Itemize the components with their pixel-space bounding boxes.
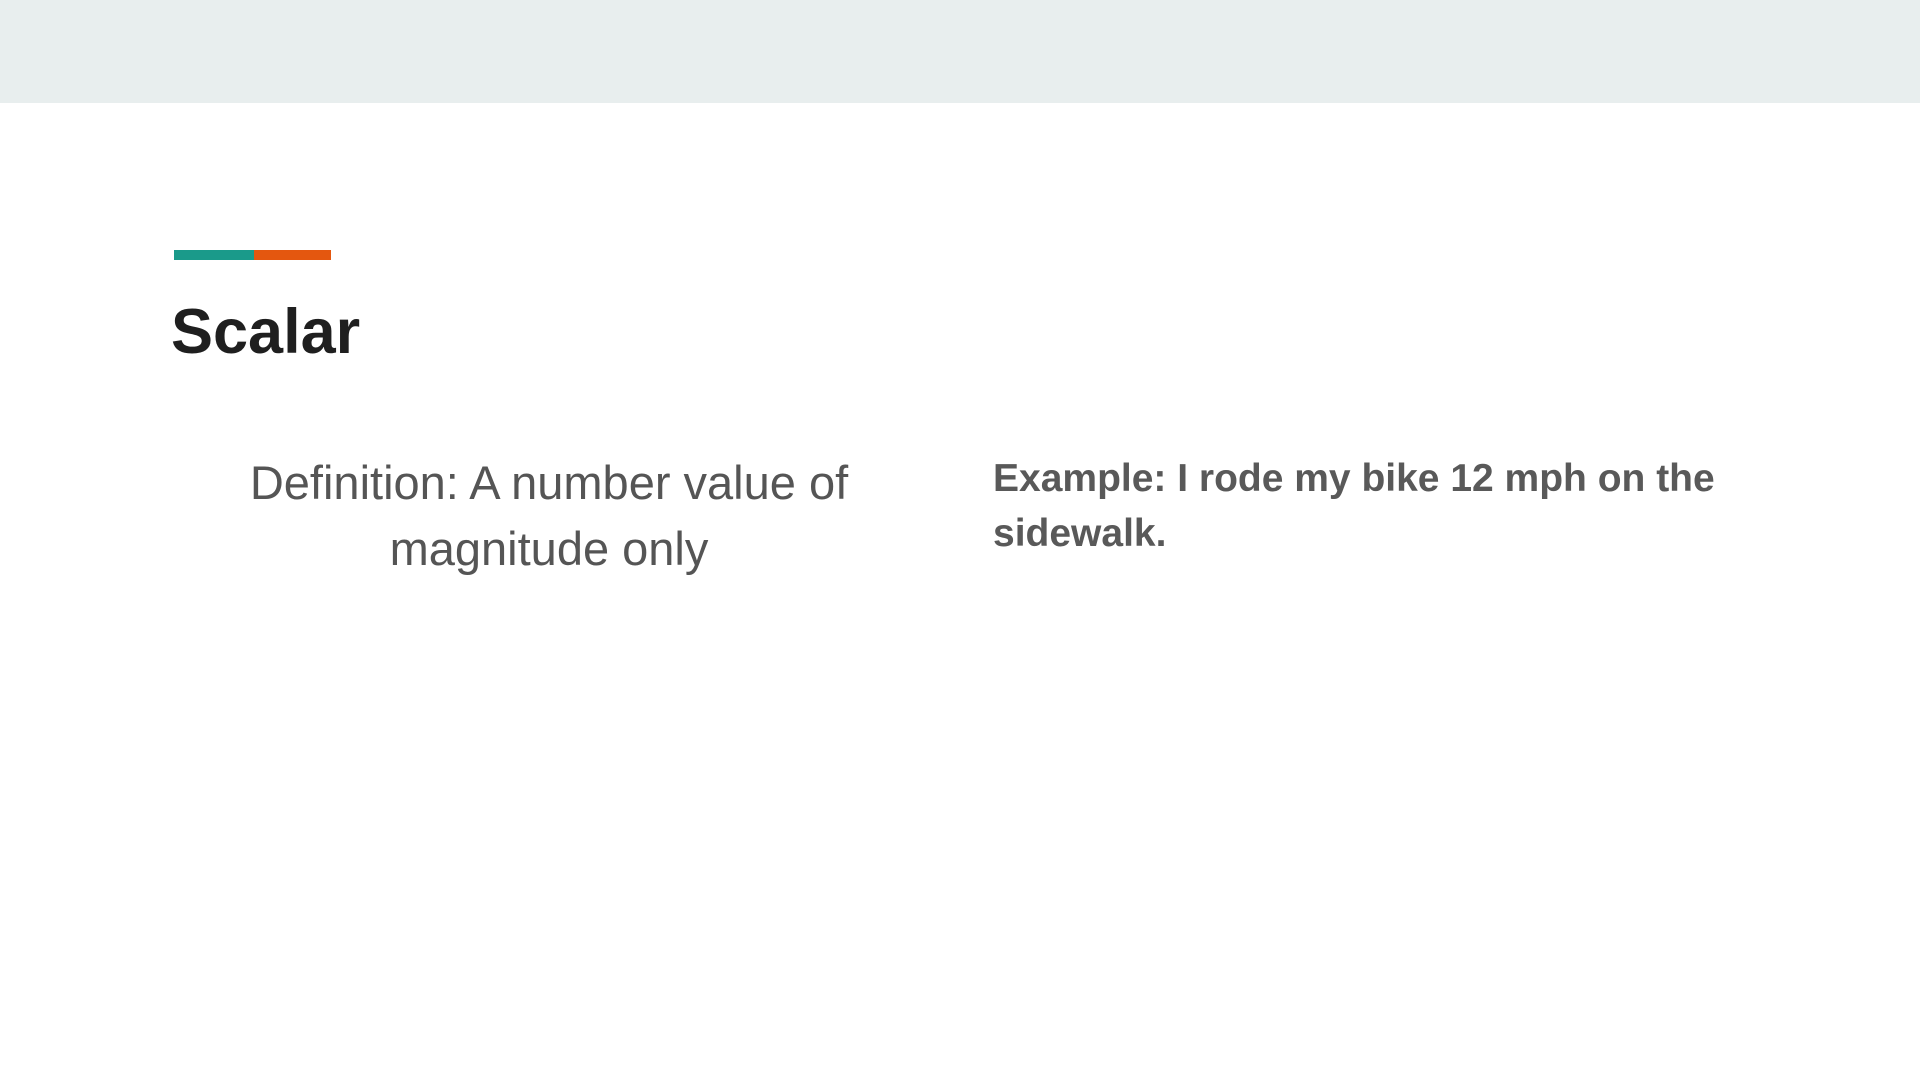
header band	[0, 0, 1920, 103]
definition text	[250, 456, 848, 575]
definition text: Definition: A number value of	[250, 456, 848, 509]
definition text: magnitude only	[390, 522, 708, 575]
example text: sidewalk.	[993, 512, 1166, 555]
title: Scalar	[171, 297, 360, 367]
example text	[993, 457, 1715, 555]
accent bar	[174, 250, 331, 260]
example text: Example: I rode my bike 12 mph on the	[993, 457, 1715, 500]
